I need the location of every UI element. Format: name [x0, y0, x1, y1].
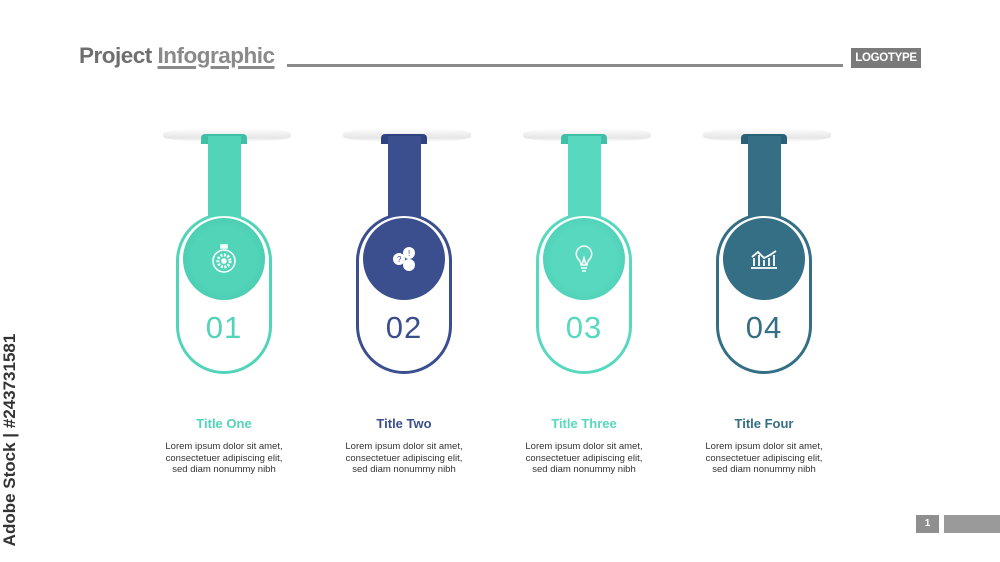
description 4: Lorem ipsum dolor sit amet,: [705, 441, 823, 452]
description 2: sed diam nonummy nibh: [352, 464, 456, 475]
page number: [916, 515, 939, 533]
column 3: [523, 131, 651, 475]
number 03: 03: [566, 310, 602, 345]
card 4 pill: [716, 213, 812, 374]
card 3 pill: [536, 213, 632, 374]
icon: light bulb: [543, 218, 625, 300]
icon: stopwatch gear: [183, 218, 265, 300]
page bar: [944, 515, 1000, 533]
description 3: [525, 441, 643, 475]
description 1: [165, 441, 283, 475]
description 1: Lorem ipsum dolor sit amet,: [165, 441, 283, 452]
description 1: consectetuer adipiscing elit,: [166, 452, 282, 464]
logotype: [851, 48, 921, 68]
logotype: LOGOTYPE: [855, 52, 917, 64]
icon: bar chart: [723, 218, 805, 300]
description 4: sed diam nonummy nibh: [712, 464, 816, 475]
description 3: Lorem ipsum dolor sit amet,: [525, 441, 643, 452]
description 2: Lorem ipsum dolor sit amet,: [345, 441, 463, 452]
icon: speech bubbles: !: [408, 249, 410, 258]
title three: Title Three: [551, 416, 617, 431]
description 2: consectetuer adipiscing elit,: [346, 452, 462, 464]
column 4: [703, 131, 831, 475]
icon: speech bubbles: ?: [397, 255, 402, 264]
header title: Project Infographic: [79, 43, 275, 68]
number 02: 02: [386, 310, 422, 345]
description 2: [345, 441, 463, 475]
card 2 pill: [356, 213, 452, 374]
number 01: 01: [206, 310, 242, 345]
icon: speech bubbles: [363, 218, 445, 300]
number 04: 04: [746, 310, 782, 345]
title four: Title Four: [734, 416, 793, 431]
description 1: sed diam nonummy nibh: [172, 464, 276, 475]
card 1 pill: [176, 213, 272, 374]
description 3: sed diam nonummy nibh: [532, 464, 636, 475]
side stock label: Adobe Stock | #243731581: [0, 334, 19, 546]
description 4: consectetuer adipiscing elit,: [706, 452, 822, 464]
column 1: [163, 131, 291, 475]
page number: 1: [925, 518, 930, 529]
column 2: [343, 131, 471, 475]
description 3: consectetuer adipiscing elit,: [526, 452, 642, 464]
header rule: [287, 64, 843, 67]
title two: Title Two: [376, 416, 432, 431]
title one: Title One: [196, 416, 252, 431]
description 4: [705, 441, 823, 475]
